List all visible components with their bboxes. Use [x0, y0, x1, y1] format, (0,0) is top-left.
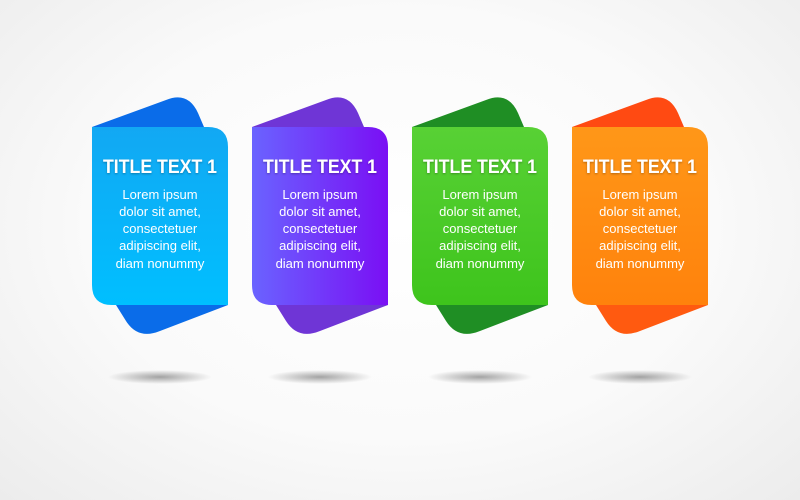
card 2 purple: dolor sit amet,: [279, 204, 361, 219]
card 3 green: Lorem ipsum: [442, 187, 518, 202]
card 4 orange: consectetuer: [603, 221, 678, 236]
card 2 purple: consectetuer: [283, 221, 358, 236]
card 4 orange: TITLE TEXT 1: [583, 157, 697, 178]
card 3 green: dolor sit amet,: [439, 204, 521, 219]
card 1 blue: [92, 97, 228, 384]
card 4 orange: Lorem ipsum: [602, 187, 678, 202]
card 4 orange: dolor sit amet,: [599, 204, 681, 219]
card 1 blue: TITLE TEXT 1: [103, 157, 217, 178]
card 1 blue: consectetuer: [123, 221, 198, 236]
card 4 orange: [572, 97, 708, 384]
card 2 purple: TITLE TEXT 1: [263, 157, 377, 178]
card 1 blue: dolor sit amet,: [119, 204, 201, 219]
card 2 purple: Lorem ipsum: [282, 187, 358, 202]
card 4 orange: diam nonummy: [596, 256, 685, 271]
card 3 green: TITLE TEXT 1: [423, 157, 537, 178]
card 4 orange: adipiscing elit,: [599, 238, 681, 253]
card 1 blue: Lorem ipsum: [122, 187, 198, 202]
card 2 purple: diam nonummy: [276, 256, 365, 271]
card 3 green: [412, 97, 548, 384]
card 3 green: consectetuer: [443, 221, 518, 236]
card 2 purple: [252, 97, 388, 384]
card 1 blue: diam nonummy: [116, 256, 205, 271]
card 2 purple: adipiscing elit,: [279, 238, 361, 253]
card 3 green: diam nonummy: [436, 256, 525, 271]
card 1 blue: adipiscing elit,: [119, 238, 201, 253]
card 3 green: adipiscing elit,: [439, 238, 521, 253]
